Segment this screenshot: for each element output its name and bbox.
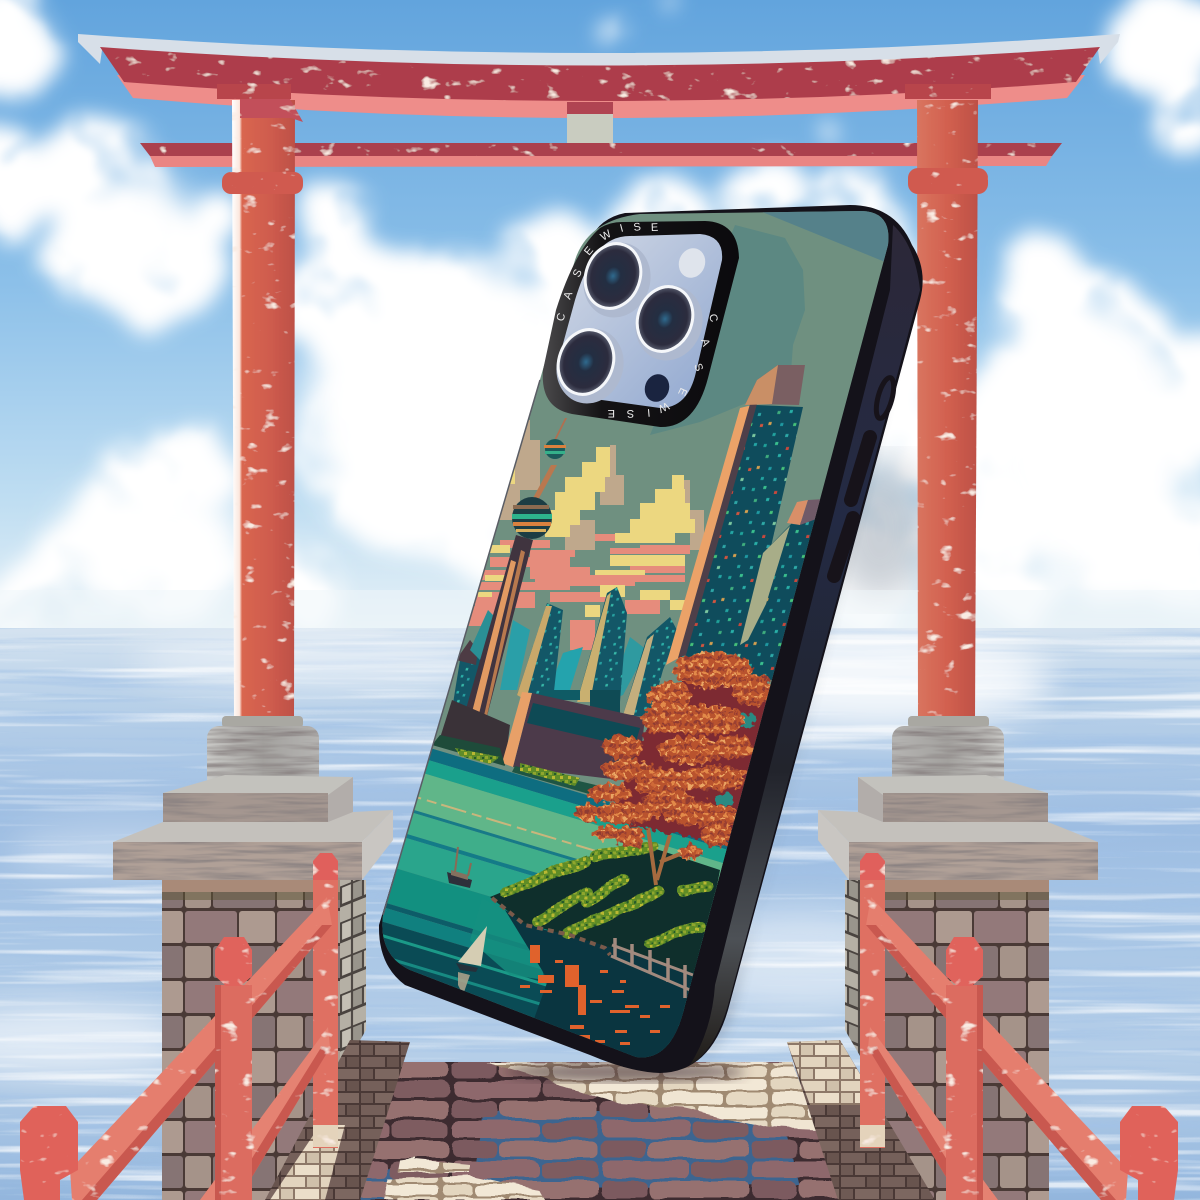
rocks [492, 898, 610, 955]
printed pixel art [382, 211, 888, 1058]
tie beam (nuki) [140, 143, 1062, 167]
right curb [787, 1040, 935, 1200]
lower sun patches [385, 1158, 545, 1200]
teal inlet [470, 929, 544, 979]
dark lagoon [505, 910, 700, 1070]
camera ring [543, 221, 739, 427]
middle post [215, 937, 252, 1200]
observation tower [464, 418, 567, 720]
flash [675, 244, 709, 282]
sky [0, 0, 1200, 630]
brand text on ring, left side: CASEWISE [554, 221, 658, 323]
reflection band [762, 211, 888, 262]
phone shadow glow [700, 260, 912, 1070]
tree trunk [646, 828, 682, 886]
low building [502, 692, 645, 780]
left curb [265, 1040, 410, 1200]
ferry boat [447, 847, 472, 888]
phone shadow on path [505, 1062, 745, 1082]
sea with ripples [0, 628, 1200, 1200]
lower rail [200, 1027, 330, 1200]
face rim highlight [383, 380, 540, 915]
top beam (kasagi) [78, 34, 1120, 118]
pixel clouds [465, 420, 704, 650]
camera island [543, 221, 739, 427]
lidar [641, 371, 673, 405]
right stone base [818, 716, 1098, 1200]
phone [378, 205, 923, 1073]
brand text on ring, right side: CASEWISE [608, 313, 720, 419]
clouds [0, 0, 1200, 643]
centre strut [567, 102, 613, 143]
right railing [860, 853, 1178, 1200]
horizon haze [0, 590, 1200, 628]
camera glass plate [558, 234, 722, 408]
left city block [440, 700, 510, 765]
case body [379, 205, 923, 1073]
sailboat [456, 926, 487, 995]
orange reflections [520, 945, 670, 1045]
lens right [625, 276, 713, 370]
sage background [370, 200, 900, 1080]
left pillar [217, 84, 303, 718]
left stone base [113, 716, 393, 1200]
island [490, 847, 720, 975]
cobble path [360, 1062, 838, 1200]
upper rail [70, 897, 332, 1200]
water bands [382, 748, 730, 1058]
far post [313, 853, 338, 1148]
brick pier [162, 880, 366, 1200]
cloud shadow behind phone [830, 460, 930, 600]
big tower [666, 365, 805, 665]
distant towers [450, 587, 678, 722]
camera shadow [650, 225, 805, 435]
near post [20, 1106, 78, 1200]
sun glitter line [418, 796, 596, 851]
case side reflection [690, 225, 920, 1065]
left railing [20, 853, 338, 1200]
stones [360, 1062, 838, 1200]
foreshore bush strips [434, 735, 597, 794]
lens bottom [546, 319, 634, 413]
tree foliage [575, 652, 773, 860]
right pillar [905, 84, 991, 718]
fence [611, 938, 693, 998]
puddles between stones [355, 1112, 800, 1200]
sunlit stones [487, 1062, 825, 1130]
walkway [265, 1040, 935, 1200]
lens top [573, 233, 661, 327]
second tower [740, 499, 820, 680]
side buttons [834, 376, 897, 576]
cloud mass glow [60, 175, 1190, 595]
